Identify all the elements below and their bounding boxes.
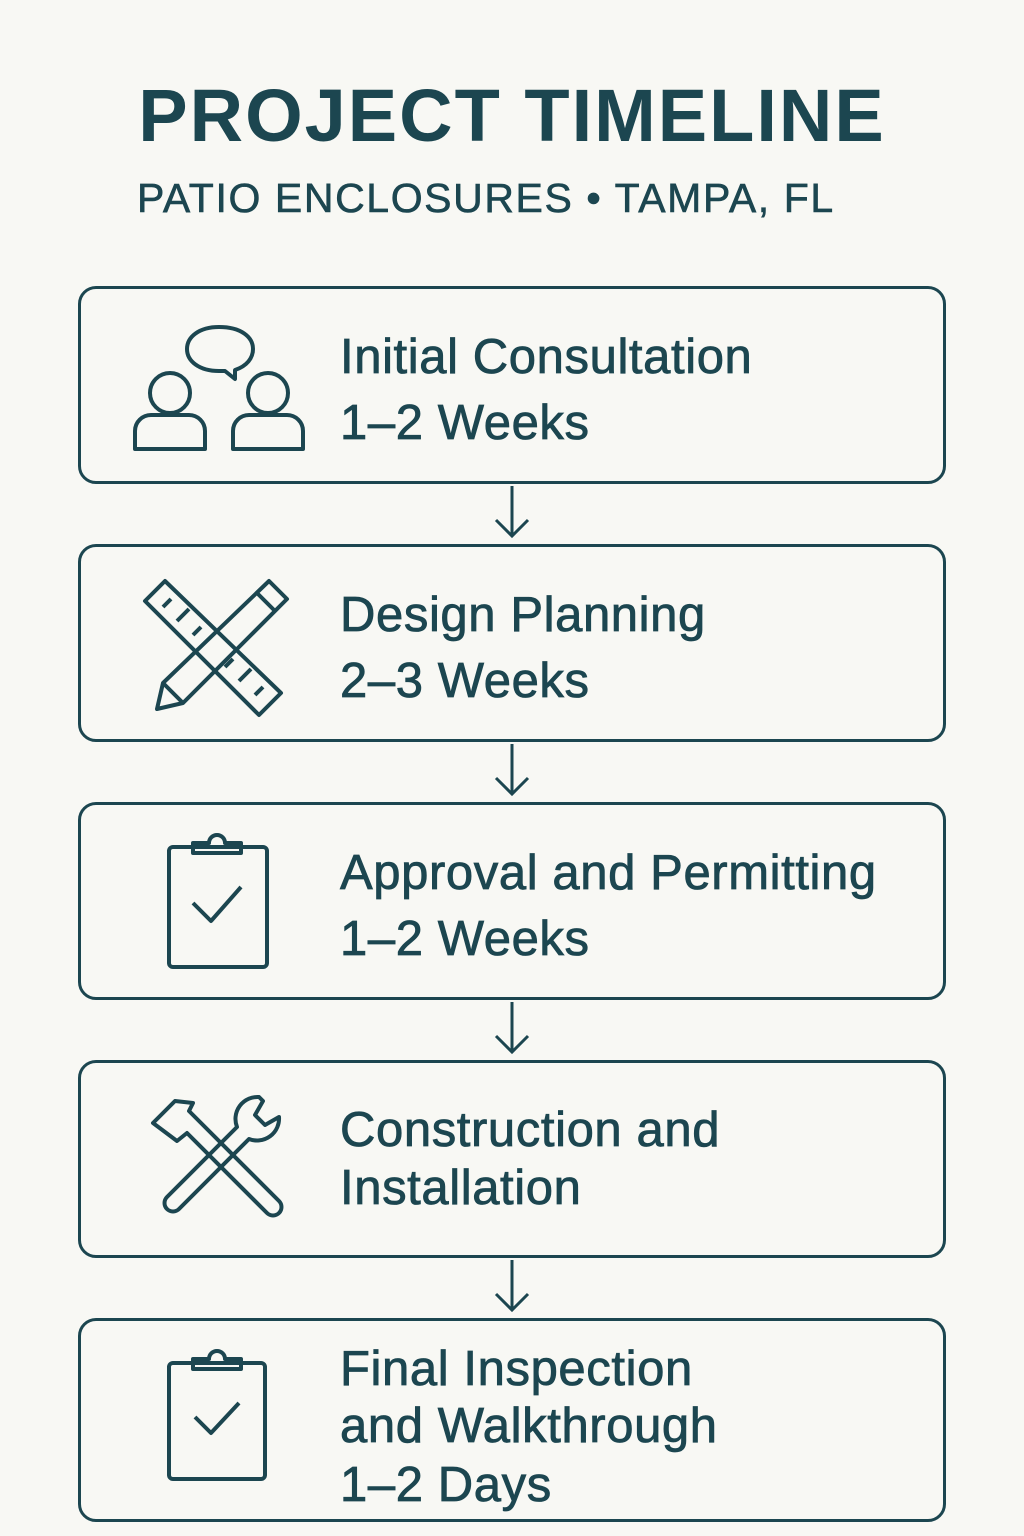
icon: hammer and wrench	[150, 1095, 284, 1218]
panel: construction and installation	[78, 1060, 946, 1258]
icon: ruler and pencil	[142, 578, 290, 718]
heading: Final Inspection	[340, 1342, 693, 1396]
heading: Construction and	[340, 1103, 720, 1157]
icon: people talking	[133, 325, 305, 451]
icon: clipboard check	[167, 1349, 267, 1481]
duration: 1–2 Weeks	[340, 912, 590, 966]
heading: Design Planning	[340, 588, 706, 642]
heading: Installation	[340, 1161, 581, 1215]
panel: initial consultation	[78, 286, 946, 484]
heading	[340, 1342, 718, 1453]
arrow	[495, 1260, 529, 1312]
panel: approval and permitting	[78, 802, 946, 1000]
duration: 1–2 Days	[340, 1458, 552, 1512]
heading: Approval and Permitting	[340, 846, 877, 900]
title: PROJECT TIMELINE	[138, 74, 886, 157]
heading: and Walkthrough	[340, 1399, 718, 1453]
arrow	[495, 486, 529, 538]
duration: 1–2 Weeks	[340, 396, 590, 450]
arrow	[495, 1002, 529, 1054]
icon: clipboard	[167, 833, 269, 969]
heading: Initial Consultation	[340, 330, 752, 384]
heading	[340, 1103, 720, 1215]
subtitle: PATIO ENCLOSURES • TAMPA, FL	[137, 175, 835, 221]
duration: 2–3 Weeks	[340, 654, 590, 708]
panel: final inspection	[78, 1318, 946, 1522]
arrow	[495, 744, 529, 796]
panel: design planning	[78, 544, 946, 742]
